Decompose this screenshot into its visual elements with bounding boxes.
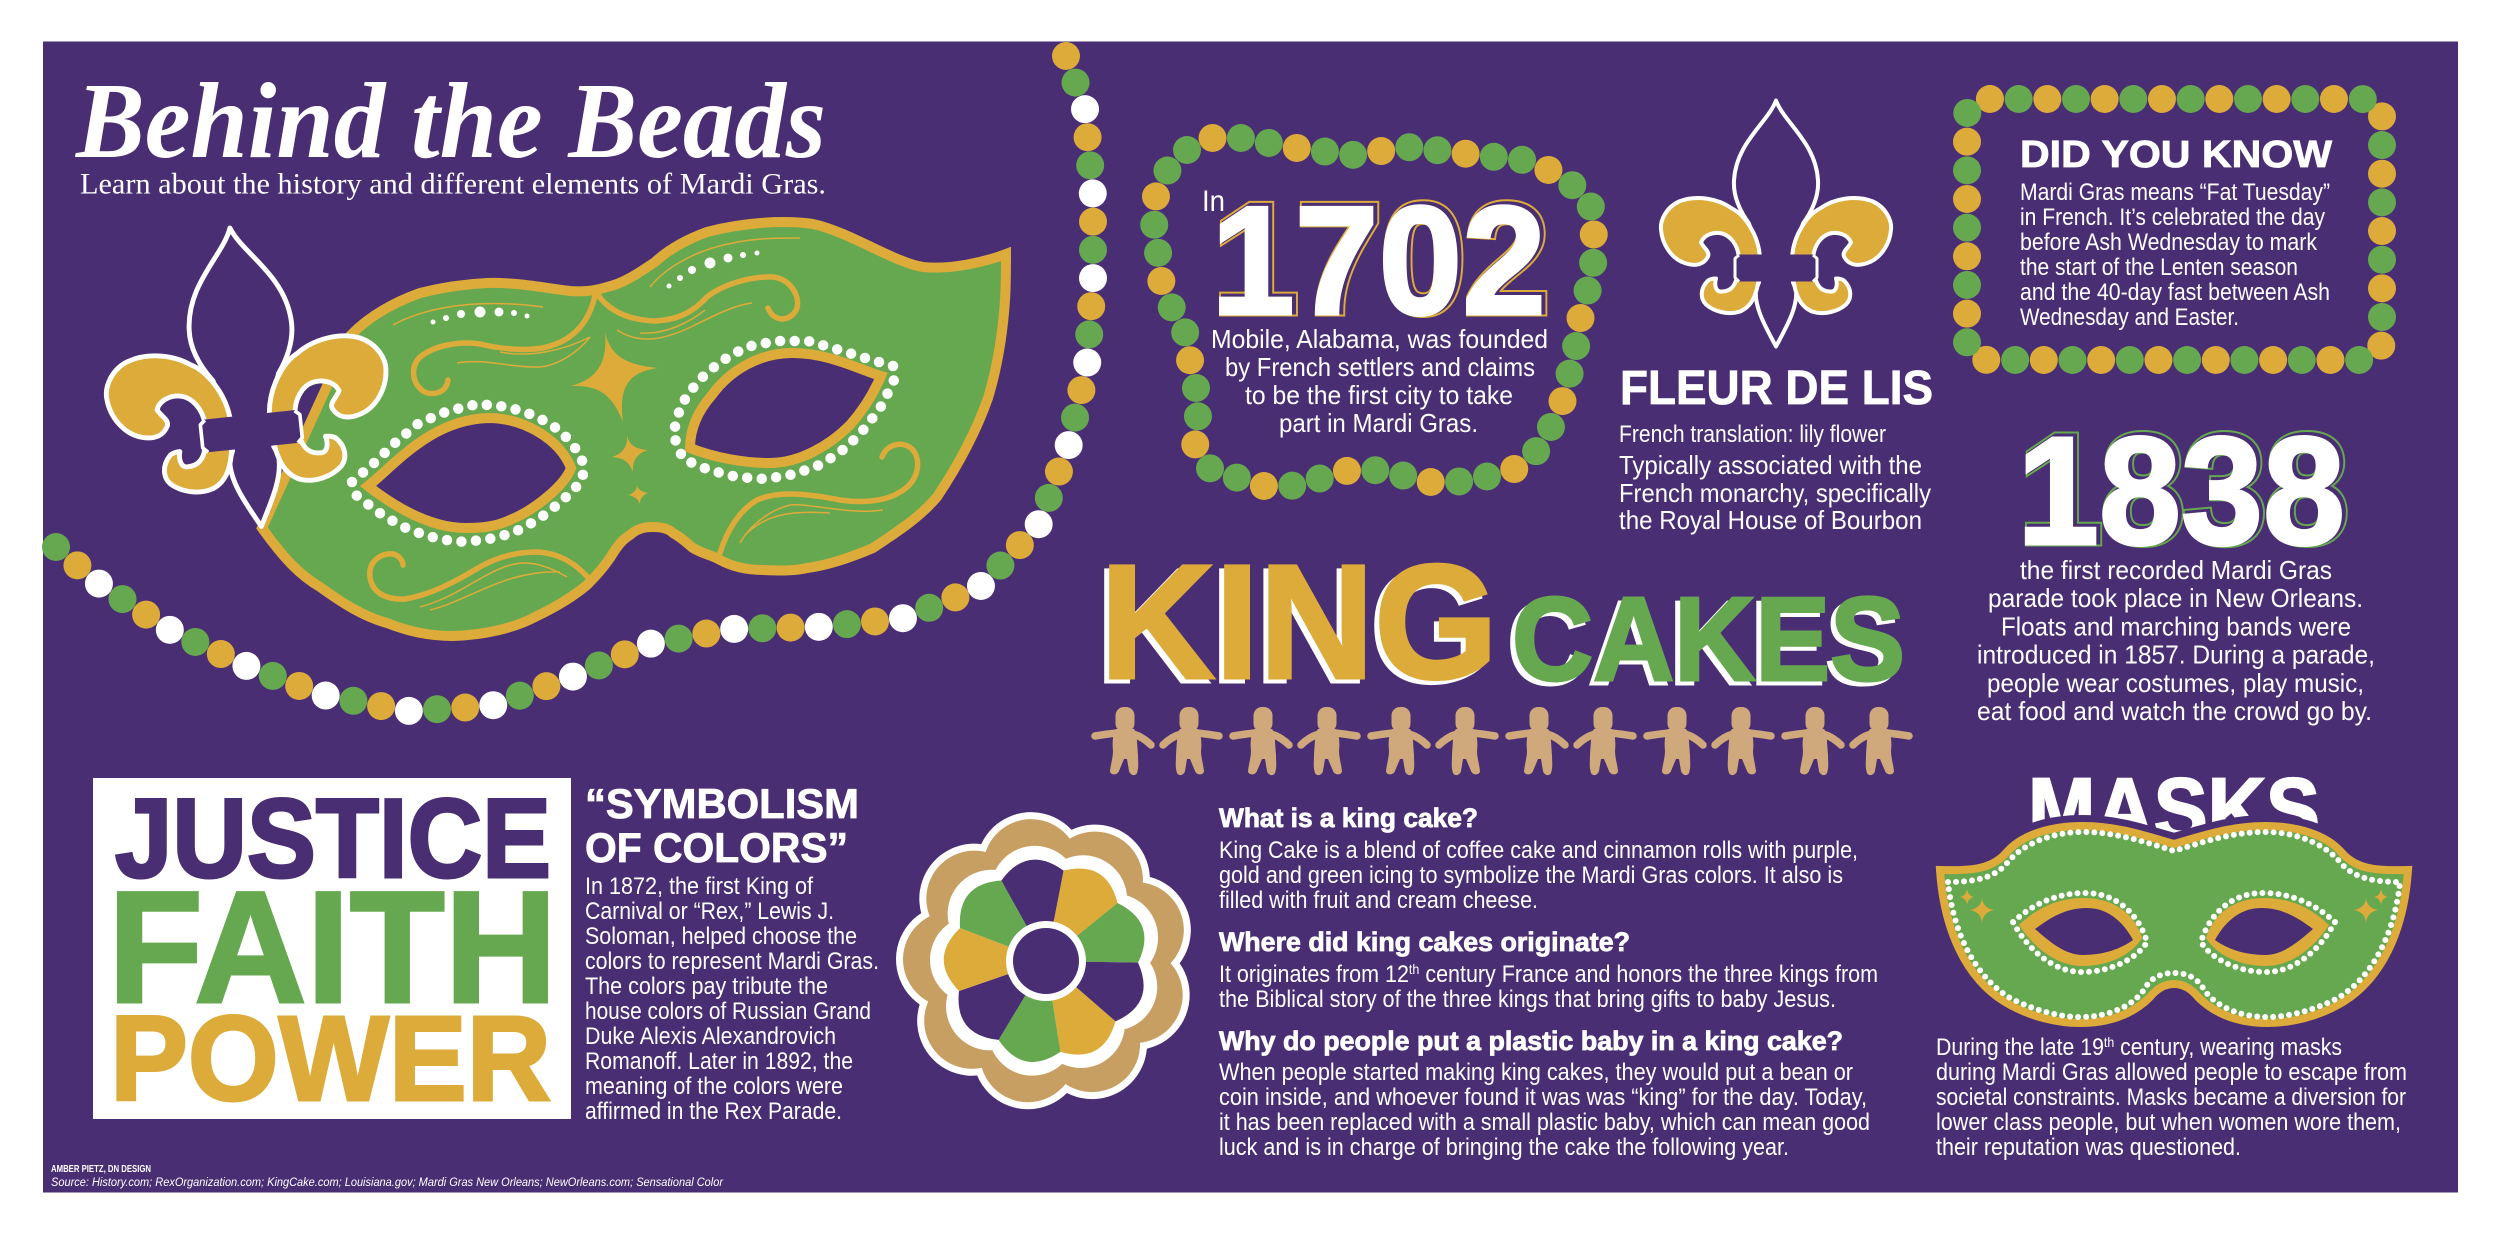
- callout: did you know: in French. It’s celebrated the day: [2020, 204, 2325, 231]
- bead strand: [56, 56, 1093, 711]
- section: symbolism of colors: OF COLORS”: [585, 824, 848, 871]
- section: fleur de lis text: the Royal House of Bourbon: [1619, 505, 1922, 535]
- section: symbolism of colors: “SYMBOLISM: [585, 780, 859, 827]
- section: king cake questions: century France and honors the three kings from: [1419, 961, 1878, 988]
- subtitle: Learn about the history and different elements of Mardi Gras.: [80, 168, 826, 200]
- section: king cake questions: [1219, 803, 1878, 1161]
- section: symbolism of colors: In 1872, the first King of: [585, 873, 813, 900]
- section: symbolism of colors: [585, 780, 879, 1125]
- section: symbolism of colors: house colors of Russian Grand: [585, 998, 871, 1025]
- credits and source: AMBER PIETZ, DN DESIGN: [51, 1164, 151, 1175]
- text: masks description: th: [2104, 1034, 2114, 1050]
- section: king cake questions: When people started making king cakes, they would put a bean or: [1219, 1059, 1853, 1086]
- icon: large fleur de lis on mask: [90, 213, 401, 541]
- heading: king cakes: CAKES: [1507, 577, 1900, 710]
- text: masks description: [1936, 1034, 2407, 1161]
- text: masks description: lower class people, but when women wore them,: [1936, 1109, 2401, 1136]
- callout: did you know: DID YOU KNOW: [2020, 134, 2332, 176]
- callout: did you know: and the 40-day fast between Ash: [2020, 279, 2330, 306]
- section: fleur de lis text: Typically associated with the: [1619, 450, 1922, 480]
- callout: 1838: eat food and watch the crowd go by.: [1977, 696, 2372, 726]
- heading: masks: MASKS: [2028, 759, 2320, 859]
- callout: 1838: 1838: [2020, 403, 2348, 575]
- callout: 1702: Mobile, Alabama, was founded: [1211, 324, 1548, 354]
- panel: justice faith power: FAITH: [108, 858, 557, 1036]
- section: symbolism of colors: The colors pay tribute the: [585, 973, 828, 1000]
- section: symbolism of colors: meaning of the colors were: [585, 1073, 843, 1100]
- section: symbolism of colors: Soloman, helped choose the: [585, 923, 857, 950]
- callout: 1702: to be the first city to take: [1245, 380, 1513, 410]
- heading: king cakes: KING: [1100, 530, 1498, 713]
- callout: did you know: [2020, 134, 2332, 331]
- callout: 1838: parade took place in New Orleans.: [1988, 583, 2363, 613]
- bead frame: did you know: [1967, 99, 2382, 360]
- callout: 1838: the first recorded Mardi Gras: [2020, 555, 2332, 585]
- callout: 1838: [1977, 403, 2375, 726]
- panel: justice faith power: [93, 776, 571, 1126]
- section: king cake questions: Why do people put a plastic baby in a king cake?: [1219, 1026, 1843, 1056]
- section: king cake questions: King Cake is a blend of coffee cake and cinnamon rolls with purple,: [1219, 837, 1858, 864]
- callout: 1702: part in Mardi Gras.: [1279, 408, 1478, 438]
- section: symbolism of colors: colors to represent Mardi Gras.: [585, 948, 879, 975]
- section: king cake questions: gold and green icing to symbolize the Mardi Gras colors. It also is: [1219, 862, 1843, 889]
- section: king cake questions: the Biblical story of the three kings that bring gifts to baby Jesus.: [1219, 986, 1836, 1013]
- callout: did you know: Mardi Gras means “Fat Tuesday”: [2020, 179, 2330, 206]
- section: fleur de lis text: [1619, 362, 1933, 535]
- text: masks description: their reputation was questioned.: [1936, 1134, 2241, 1161]
- callout: 1702: 1702: [1214, 172, 1549, 345]
- callout: 1702: 1702: [1211, 174, 1546, 347]
- panel: justice faith power: POWER: [110, 990, 551, 1126]
- text: masks description: during Mardi Gras allowed people to escape from: [1936, 1059, 2407, 1086]
- callout: 1702: 1702: [1214, 172, 1549, 345]
- section: king cake questions: luck and is in charge of bringing the cake the following year.: [1219, 1134, 1789, 1161]
- section: fleur de lis text: French translation: lily flower: [1619, 421, 1886, 448]
- text: masks description: During the late 19: [1936, 1034, 2125, 1061]
- section: symbolism of colors: Carnival or “Rex,” Lewis J.: [585, 898, 834, 925]
- section: symbolism of colors: affirmed in the Rex Parade.: [585, 1098, 842, 1125]
- callout: 1838: Floats and marching bands were: [2001, 612, 2351, 642]
- callout: 1838: 1838: [2017, 405, 2345, 577]
- callout: did you know: before Ash Wednesday to mark: [2020, 229, 2318, 256]
- panel: justice faith power: JUSTICE: [115, 776, 551, 901]
- icon: fleur de lis: [1661, 100, 1891, 346]
- callout: did you know: the start of the Lenten season: [2020, 254, 2298, 281]
- callout: 1702: In: [1202, 185, 1225, 218]
- bead frame: 1702: [1154, 138, 1594, 486]
- title: Behind the Beads: [75, 62, 826, 181]
- section: king cake questions: coin inside, and whoever found it was was “king” for the day. Today,: [1219, 1084, 1867, 1111]
- section: symbolism of colors: Duke Alexis Alexandrovich: [585, 1023, 836, 1050]
- section: king cake questions: filled with fruit and cream cheese.: [1219, 887, 1538, 914]
- illustration: large green mask: [262, 222, 1006, 636]
- section: king cake questions: Where did king cakes originate?: [1219, 927, 1630, 957]
- section: king cake questions: It originates from 12: [1219, 961, 1431, 988]
- section: fleur de lis text: FLEUR DE LIS: [1620, 362, 1933, 415]
- text: masks description: century, wearing masks: [2114, 1034, 2342, 1061]
- callout: did you know: Wednesday and Easter.: [2020, 304, 2239, 331]
- section: king cake questions: th: [1409, 961, 1419, 977]
- section: fleur de lis text: French monarchy, specifically: [1619, 478, 1931, 508]
- credits and source: [51, 1164, 724, 1189]
- section: king cake questions: it has been replaced with a small plastic baby, which can mean good: [1219, 1109, 1870, 1136]
- heading: king cakes: KING: [1095, 534, 1493, 717]
- callout: 1838: 1838: [2020, 403, 2348, 575]
- illustration: king cake: [895, 804, 1206, 1119]
- heading: king cakes: CAKES: [1512, 573, 1905, 706]
- section: symbolism of colors: Romanoff. Later in 1892, the: [585, 1048, 853, 1075]
- row of plastic babies: [1095, 707, 1909, 775]
- callout: 1702: [1202, 172, 1549, 438]
- callout: 1702: by French settlers and claims: [1225, 352, 1535, 382]
- heading: king cakes: [1095, 530, 1905, 717]
- illustration: small green mask: [1936, 822, 2412, 1027]
- credits and source: Source: History.com; RexOrganization.com; KingCake.com; Louisiana.gov; Mardi Gras New Orleans; NewOrleans.com; Sensational Color: [51, 1177, 724, 1189]
- callout: 1838: people wear costumes, play music,: [1987, 668, 2364, 698]
- callout: 1838: introduced in 1857. During a parade,: [1977, 640, 2375, 670]
- section: king cake questions: What is a king cake?: [1219, 803, 1478, 833]
- text: masks description: societal constraints. Masks became a diversion for: [1936, 1084, 2406, 1111]
